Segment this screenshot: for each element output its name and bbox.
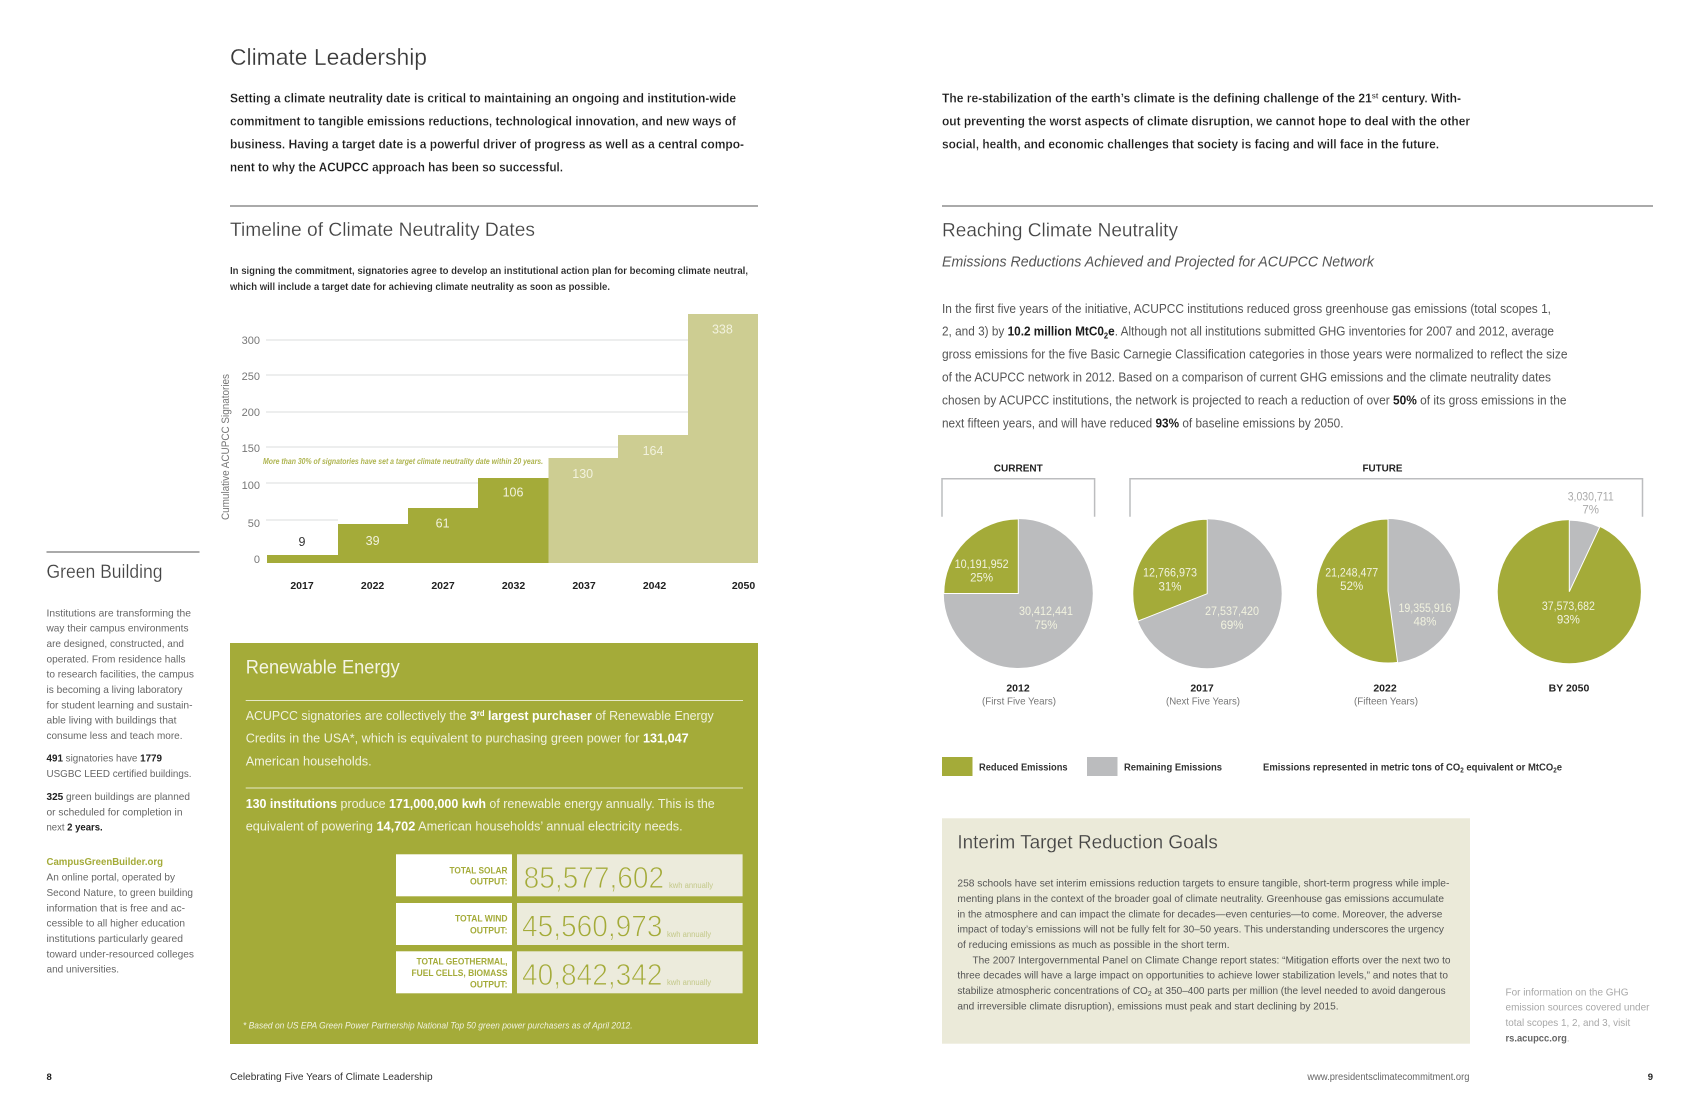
text block: GHG sources note [1506,986,1650,1044]
text: CampusGreenBuilder.org [46,856,194,975]
caption: (Next Five Years) [1166,696,1240,708]
pie chart: 2022: 52% [1340,581,1363,593]
pie chart: by 2050: 3,030,711 [1568,492,1614,504]
text: description: are designed, constructed, and [46,638,184,650]
heading: Green Building: Green Building [46,562,162,583]
text: CampusGreenBuilder.org: CampusGreenBuilder.org [46,856,163,868]
stat: total wind output [396,903,743,945]
footer: left [46,1072,433,1083]
pie chart: 2012 [944,519,1093,708]
text block: Reaching Climate Neutrality body: next fifteen years, and will have reduced 93% of baseline emissions by 2050. [942,416,1344,430]
legend [942,757,1562,776]
text block: Reaching Climate Neutrality body: gross emissions for the five Basic Carnegie Classification categories in those years were normalized to reflect the size [942,348,1568,362]
text block: impact of today’s emissions will not be fully felt for 30–50 years. This understanding underscores the urgency [957,924,1445,936]
text: description: Institutions are transforming the [46,607,191,619]
text: production paragraph: equivalent of powering 14,702 American households’ annual electricity needs. [246,819,683,834]
text block: right intro [942,91,1470,152]
text block: GHG sources note: For information on the GHG [1506,986,1628,998]
stat: total solar output: 85,577,602 [524,861,664,895]
caption: 2012 [1006,683,1030,695]
bracket: future: FUTURE [1362,463,1402,475]
bars: achieved [267,478,548,563]
text: description [46,607,194,742]
text block: Reaching Climate Neutrality body [942,302,1568,430]
bracket: future [1130,463,1642,517]
caption: (First Five Years) [982,696,1056,708]
text: production paragraph [246,796,715,834]
pie chart: 2022: 19,355,916 [1398,603,1452,615]
text block: stabilize atmospheric concentrations of CO [957,985,1157,997]
y axis labels [242,335,260,566]
legend: 2 [1460,767,1464,774]
stat: total geothermal output: kwh annually [667,978,711,987]
text: description: able living with buildings that [46,715,177,727]
heading: Timeline of Climate Neutrality Dates: Timeline of Climate Neutrality Dates [230,220,535,241]
text: CampusGreenBuilder.org: Second Nature, to green building [46,887,193,899]
text block: Reaching Climate Neutrality body: . Although not all institutions submitted GHG inventories for 2007 and 2012, average [1115,325,1580,339]
x axis years: 2032 [502,580,525,592]
text block: 258 schools have set interim emissions reduction targets to ensure tangible, short-term progress while imple- [957,878,1450,890]
heading: Renewable Energy: Renewable Energy [246,658,400,678]
x axis years: 2050 [732,580,755,592]
footer: right: www.presidentsclimatecommitment.org [1306,1072,1469,1083]
bar chart: cumulative signatories by neutrality date [220,314,758,592]
bracket: current [942,463,1095,517]
caption: 2022 [1373,683,1397,695]
text block: right intro: social, health, and economic challenges that society is facing and will face in the future. [942,137,1439,152]
text block: 2 [1148,991,1152,998]
text block: Reaching Climate Neutrality body: chosen by ACUPCC institutions, the network is projected to reach a reduction of over 50% of its gross emissions in the [942,394,1567,408]
caption [982,683,1056,708]
footer: left: 8 [46,1072,52,1083]
text block: Reaching Climate Neutrality body: 2 [1104,332,1109,341]
text: CampusGreenBuilder.org: An online portal, operated by [46,872,176,884]
text: description: way their campus environments [46,623,189,635]
text block: GHG sources note: total scopes 1, 2, and 3, visit [1506,1017,1630,1029]
pie chart: 2017: 12,766,973 [1143,568,1197,580]
text block: and irreversible climate disruption), emissions must peak and start declining by 2015. [957,1000,1339,1012]
data labels: 106 [503,486,523,500]
footnote: * Based on US EPA Green Power Partnership National Top 50 green power purchasers as of April 2012. [243,1021,633,1031]
stat: total geothermal output [396,951,743,993]
text block: left intro [230,91,744,175]
text: description: for student learning and sustain- [46,699,193,711]
heading: Reaching Climate Neutrality: Reaching Climate Neutrality [942,220,1178,242]
y axis labels: 100 [242,480,260,492]
footer: right [1306,1072,1653,1083]
text: CampusGreenBuilder.org: and universities. [46,963,119,975]
stat: total wind output: TOTAL WIND [455,914,508,925]
stat: total wind output: OUTPUT: [470,925,508,936]
pie chart: by 2050: 7% [1582,505,1599,517]
caption [1354,683,1418,708]
data labels: 39 [366,534,380,548]
text: CampusGreenBuilder.org: cessible to all higher education [46,918,185,930]
text block: left intro: Setting a climate neutrality date is critical to maintaining an ongoing and institution-wide [230,91,736,106]
stat: total solar output: TOTAL SOLAR [450,865,508,876]
text: purchaser paragraph: largest purchaser [485,708,592,723]
text block: right intro: The re-stabilization of the earth’s climate is the defining challenge of the 21 [942,91,1406,106]
text block [957,878,1451,1012]
text: purchaser paragraph [246,708,714,769]
text block: Reaching Climate Neutrality body: e [1108,325,1115,339]
caption: (Fifteen Years) [1354,696,1418,708]
y axis labels: 150 [242,443,260,455]
text: CampusGreenBuilder.org: information that is free and ac- [46,902,185,914]
text: planned buildings stat: next 2 years. [46,822,103,834]
text: planned buildings stat: or scheduled for completion in [46,806,183,818]
text: description: consume less and teach more. [46,730,182,742]
text: purchaser paragraph: American households. [246,754,372,769]
text block: Reaching Climate Neutrality body: In the first five years of the initiative, ACUPCC institutions reduced gross greenhouse gas emissions (total scopes 1, [942,302,1551,316]
text block: left intro: commitment to tangible emissions reductions, technological innovation, and new ways of [230,114,737,129]
text block: GHG sources note: emission sources covered under [1506,1002,1650,1014]
bars: projected [548,314,758,563]
x axis years: 2017 [290,580,314,592]
data labels: 61 [436,516,450,530]
data labels: 164 [643,444,663,458]
pie chart: 2012: 75% [1034,620,1058,632]
pie chart: 2012: 30,412,441 [1019,606,1073,618]
footer: right: 9 [1648,1072,1653,1083]
caption: BY 2050 [1549,683,1589,695]
stat: total wind output: kwh annually [667,930,711,939]
text block: timeline intro: which will include a target date for achieving climate neutrality as soon as possible. [229,281,610,293]
data labels: 9 [299,535,306,549]
pie chart: 2017: 69% [1220,620,1244,632]
data labels: 130 [572,467,593,481]
stat: total solar output: OUTPUT: [470,877,508,888]
text: purchaser paragraph: Credits in the USA*, which is equivalent to purchasing green power for 131,047 [246,731,689,746]
text: description: is becoming a living laboratory [46,684,183,696]
text block: left intro: nent to why the ACUPCC approach has been so successful. [230,160,563,175]
pie chart: 2022: 48% [1413,616,1437,628]
bracket: current: CURRENT [994,463,1043,475]
legend: Reduced Emissions [979,761,1068,773]
text: purchaser paragraph: of Renewable Energy [595,708,720,723]
stat: total solar output [396,854,743,896]
footer: left: Celebrating Five Years of Climate Leadership [230,1072,433,1083]
panel: Green Building sidebar [46,552,200,975]
text block: of reducing emissions as much as possible in the short term. [957,939,1230,951]
pie chart: 2022 [1316,519,1460,708]
text: planned buildings stat: 325 green buildings are planned [46,791,190,803]
x axis years: 2027 [431,580,455,592]
y axis labels: 200 [242,407,260,419]
stat: total geothermal output: FUEL CELLS, BIOMASS [412,968,508,979]
text: purchaser paragraph: ACUPCC signatories are collectively the 3 [246,708,478,723]
text block: right intro: out preventing the worst aspects of climate disruption, we cannot hope to deal with the other [942,114,1470,129]
legend: 2 [1553,767,1557,774]
stat: total wind output: 45,560,973 [522,910,662,944]
pie chart: 2012: 10,191,952 [955,559,1009,571]
legend: equivalent or MtCO [1464,761,1553,773]
heading: Interim Target Reduction Goals [957,832,1218,853]
x axis years [290,580,755,592]
text block: timeline intro: In signing the commitment, signatories agree to develop an institutional action plan for becoming climate neutral, [230,265,748,277]
panel: Interim Target Reduction Goals [942,818,1470,1044]
text: LEED stat [46,753,192,780]
y axis labels: 0 [254,554,260,566]
text: CampusGreenBuilder.org: toward under-resourced colleges [46,948,194,960]
text block: three decades will have a large impact on opportunities to achieve lower stabilization levels,” and notes that to [957,970,1448,982]
text: CampusGreenBuilder.org: institutions particularly geared [46,933,183,945]
text block: The 2007 Intergovernmental Panel on Climate Change report states: “Mitigation efforts over the next two to [972,954,1451,966]
text block: right intro: century. With- [1378,91,1461,106]
text block: Reaching Climate Neutrality body: of the ACUPCC network in 2012. Based on a comparison of current GHG emissions and the climate neutrality dates [942,371,1551,385]
title: Climate Leadership: Climate Leadership [230,44,427,70]
stat: total geothermal output: TOTAL GEOTHERMAL, [416,957,508,968]
text block: timeline intro [229,265,748,293]
x axis years: 2022 [361,580,384,592]
stat: total geothermal output: 40,842,342 [522,958,662,992]
pie chart: by 2050: 93% [1557,614,1580,626]
data labels: 338 [712,322,733,336]
text: description: to research facilities, the campus [46,669,194,681]
pie chart: 2012: 25% [970,573,993,585]
text block: GHG sources note: rs.acupcc.org. [1506,1032,1570,1044]
y axis labels: 300 [242,335,260,347]
x axis years: 2042 [643,580,666,592]
y axis labels: 250 [242,371,260,383]
pie chart: 2022: 21,248,477 [1325,568,1378,580]
text block: at 350–400 parts per million (the level needed to avoid dangerous [1152,985,1446,997]
pie chart: by 2050: 37,573,682 [1542,601,1595,613]
caption [1166,683,1240,708]
pie chart: 2017 [1133,519,1282,708]
text: production paragraph: 130 institutions produce 171,000,000 kwh of renewable energy annually. This is the [246,796,715,811]
text: description: operated. From residence halls [46,653,186,665]
caption: 2017 [1190,683,1214,695]
pie chart: 2017: 27,537,420 [1205,606,1259,618]
text: LEED stat: USGBC LEED certified buildings. [46,768,192,780]
text: LEED stat: 491 signatories have 1779 [46,753,162,765]
subheading: Emissions Reductions Achieved and Projected for ACUPCC Network [942,255,1375,271]
pie chart: by 2050 [1498,492,1641,695]
pie chart: 2017: 31% [1158,582,1182,594]
y axis title: Cumulative ACUPCC Signatories [220,374,232,520]
data labels [299,322,733,549]
text block: left intro: business. Having a target date is a powerful driver of progress as well as a central compo- [230,137,744,152]
text block: right intro: st [1372,92,1379,101]
text block: in the atmosphere and can impact the climate for decades—even centuries—to come. Moreover, the adverse [957,908,1443,920]
panel: Renewable Energy [230,643,758,1044]
y axis labels: 50 [248,518,260,530]
stat: total solar output: kwh annually [669,881,713,890]
text block: Reaching Climate Neutrality body: 2, and 3) by 10.2 million MtC0 [942,325,1110,339]
legend: e [1557,761,1562,773]
stat: total geothermal output: OUTPUT: [470,980,508,991]
text block: menting plans in the context of the broader goal of climate neutrality. Greenhouse gas emissions accumulate [957,893,1444,905]
x axis years: 2037 [572,580,596,592]
chart note: More than 30% of signatories have set a target climate neutrality date within 20 years. [263,457,543,466]
text: purchaser paragraph: rd [477,709,485,718]
text: planned buildings stat [46,791,190,834]
legend: Remaining Emissions [1124,761,1222,773]
legend: Emissions represented in metric tons of CO [1263,761,1482,773]
